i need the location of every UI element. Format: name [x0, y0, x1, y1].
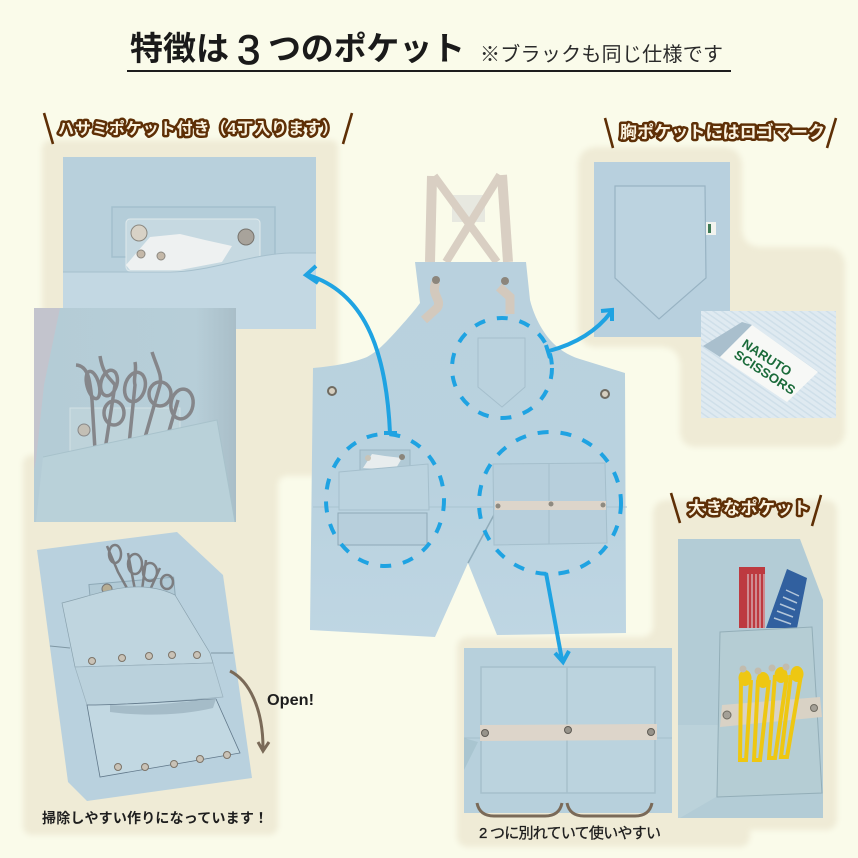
- strap: [720, 697, 822, 727]
- photo: chest pocket: [594, 162, 730, 337]
- yellow clips: [740, 675, 801, 760]
- apron body: [310, 262, 626, 637]
- straps: [430, 175, 508, 262]
- arrow: to large pocket photo: [546, 573, 569, 662]
- title: 3: [237, 26, 260, 73]
- caption: split in two: 2 つに別れていて使いやすい: [479, 825, 661, 842]
- photo: large pocket with combs and clips: [678, 539, 823, 818]
- heading: large pocket: 大きなポケット: [688, 498, 810, 518]
- title: [127, 26, 731, 73]
- photo: logo tag: NARUTO: [739, 336, 795, 379]
- eyelets: [328, 387, 609, 398]
- photo: scissor holder close-up: [63, 157, 316, 329]
- panel backing: scissor pocket: [23, 140, 338, 835]
- heading: scissor pocket: [44, 113, 352, 144]
- pocket: [717, 627, 822, 797]
- open arrow: [230, 671, 269, 751]
- photo: logo tag: SCISSORS: [731, 347, 799, 398]
- heading: chest pocket: 胸ポケットにはロゴマーク: [620, 122, 825, 142]
- ties: [424, 276, 510, 320]
- title: ※ブラックも同じ仕様です: [480, 42, 723, 66]
- panel backing: large pocket: [457, 500, 837, 847]
- bracket: two compartments: [477, 803, 652, 816]
- red comb: [739, 567, 765, 628]
- photo: logo tag: [701, 311, 836, 418]
- photo: two-part pocket: [464, 648, 672, 813]
- title: つのポケット: [268, 30, 465, 67]
- apron illustration: [310, 175, 627, 637]
- dashed circle: chest pocket: [452, 318, 552, 418]
- heading: scissor pocket: ハサミポケット付き（4丁入ります）: [58, 120, 338, 138]
- dashed circle: large pocket: [479, 432, 621, 574]
- heading: large pocket: [671, 493, 821, 526]
- caption: easy to clean: 掃除しやすい作りになっています！: [42, 810, 268, 826]
- dashed circle: scissor pocket: [326, 434, 444, 566]
- chest pocket: [478, 338, 525, 407]
- large pocket: [493, 463, 607, 545]
- photo: pocket opened: [37, 532, 252, 801]
- photo: scissors in pocket: [34, 308, 236, 522]
- scissor pocket: [338, 450, 429, 545]
- panel backing: chest pocket: [578, 147, 845, 447]
- heading: chest pocket: [605, 118, 836, 148]
- blue comb: [766, 569, 807, 628]
- arrow: to scissor photo: [306, 266, 397, 433]
- arrow: to chest photo: [546, 310, 612, 358]
- title: 特徴は: [130, 30, 229, 67]
- open label: Open!: [267, 692, 314, 709]
